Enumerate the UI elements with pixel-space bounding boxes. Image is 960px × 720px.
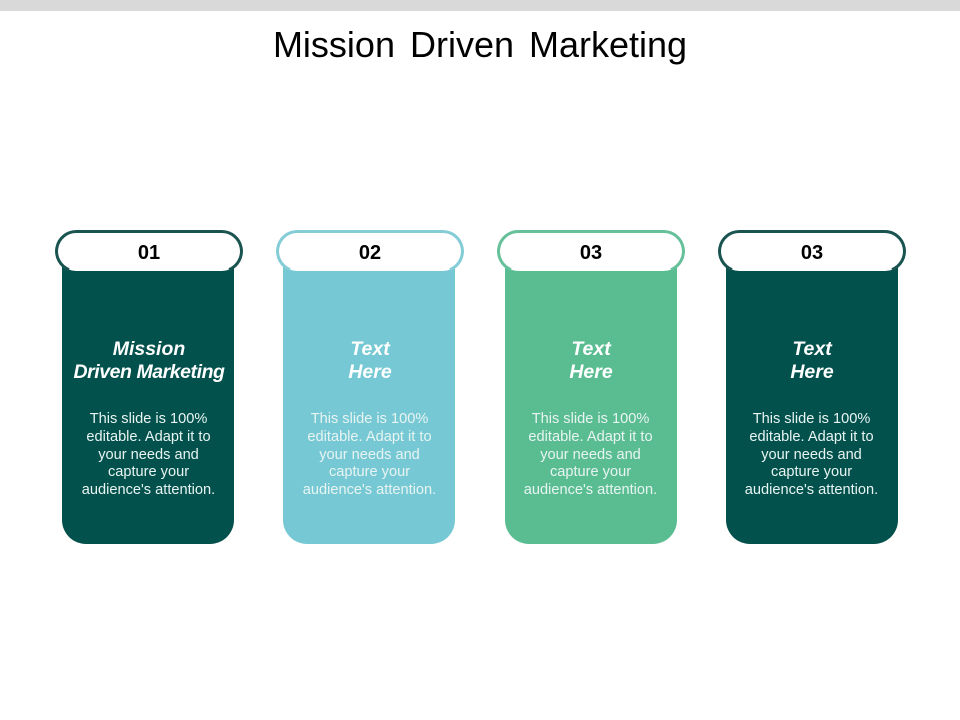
panel text: editable. Adapt it to bbox=[749, 429, 874, 445]
panel: 01 bbox=[55, 230, 243, 544]
top grey bar bbox=[0, 0, 960, 11]
number pill: 03 bbox=[580, 242, 602, 264]
panel text: This slide is 100% bbox=[753, 411, 870, 427]
panel heading: Here bbox=[569, 361, 613, 383]
panel text: your needs and bbox=[98, 447, 199, 463]
panel text: your needs and bbox=[761, 447, 862, 463]
title: Mission Driven Marketing bbox=[273, 24, 687, 65]
number pill: 01 bbox=[138, 242, 160, 264]
panel heading: Text bbox=[792, 338, 832, 360]
number pill bbox=[497, 230, 685, 271]
panel text: audience's attention. bbox=[745, 482, 878, 498]
panel heading: Here bbox=[348, 361, 392, 383]
panel text: editable. Adapt it to bbox=[86, 429, 211, 445]
panel heading bbox=[569, 338, 613, 383]
panel text bbox=[303, 411, 436, 498]
panel text: This slide is 100% bbox=[311, 411, 428, 427]
panel heading bbox=[348, 338, 392, 383]
panel text: editable. Adapt it to bbox=[307, 429, 432, 445]
panel heading bbox=[73, 338, 225, 383]
panel text: your needs and bbox=[319, 447, 420, 463]
number pill bbox=[55, 230, 243, 271]
number pill bbox=[276, 230, 464, 271]
panel body bbox=[505, 250, 677, 544]
panel text bbox=[745, 411, 878, 498]
panel text: audience's attention. bbox=[303, 482, 436, 498]
panel text: capture your bbox=[108, 464, 189, 480]
panel: 02 bbox=[276, 230, 464, 544]
panel: 04 bbox=[718, 230, 906, 544]
panel body bbox=[726, 250, 898, 544]
panel heading: Mission bbox=[113, 338, 185, 360]
panel text: capture your bbox=[771, 464, 852, 480]
panel heading: Text bbox=[350, 338, 390, 360]
panel text: your needs and bbox=[540, 447, 641, 463]
panel text: editable. Adapt it to bbox=[528, 429, 653, 445]
panel text: capture your bbox=[550, 464, 631, 480]
panel heading bbox=[790, 338, 834, 383]
number pill: 03 bbox=[801, 242, 823, 264]
panel: 03 bbox=[497, 230, 685, 544]
panel body bbox=[283, 250, 455, 544]
panel text: This slide is 100% bbox=[532, 411, 649, 427]
number pill bbox=[718, 230, 906, 271]
panel heading: Driven Marketing bbox=[73, 361, 224, 383]
panel text bbox=[82, 411, 215, 498]
panel text: capture your bbox=[329, 464, 410, 480]
panel body bbox=[62, 250, 234, 544]
panel text: audience's attention. bbox=[82, 482, 215, 498]
panel text bbox=[524, 411, 657, 498]
panel text: audience's attention. bbox=[524, 482, 657, 498]
panel heading: Here bbox=[790, 361, 834, 383]
panel text: This slide is 100% bbox=[90, 411, 207, 427]
number pill: 02 bbox=[359, 242, 381, 264]
panel heading: Text bbox=[571, 338, 611, 360]
